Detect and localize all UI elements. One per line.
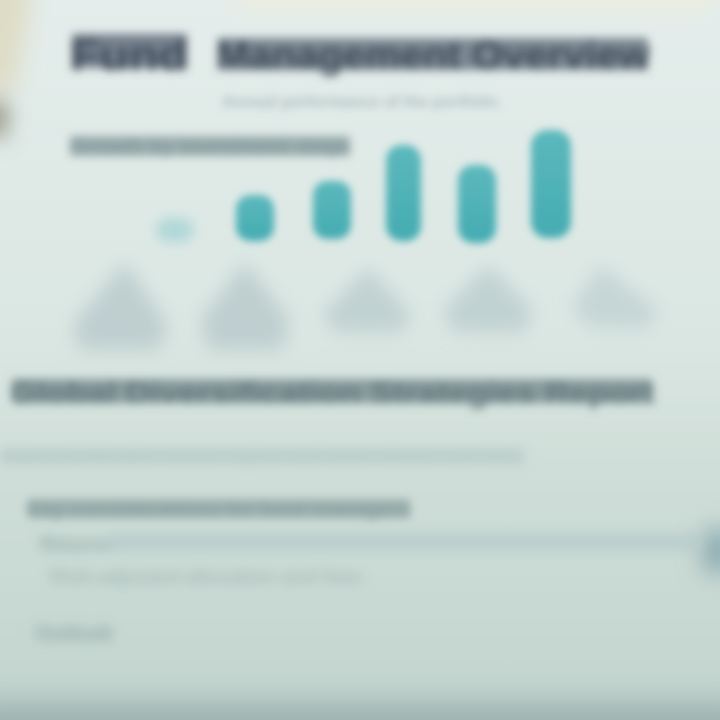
bar 4 <box>386 145 421 241</box>
icon: pie 1 <box>72 262 168 350</box>
bar 3 <box>313 181 351 239</box>
icon: pie 3 <box>322 268 412 332</box>
list line 1: Returns <box>40 534 112 554</box>
bar chart <box>156 130 571 243</box>
list line 2: Risk-adjusted allocation and fees <box>50 567 362 587</box>
detail heading: Key considerations for fund managers <box>26 500 411 521</box>
list line 3: Outlook <box>35 623 114 645</box>
title <box>70 31 650 80</box>
detail text block <box>35 534 700 645</box>
icon: pie 2 <box>200 262 290 350</box>
icon: pie 5 <box>572 265 660 328</box>
section heading: Global Diversification Strategies Report <box>10 377 655 410</box>
bar 6 <box>531 130 571 238</box>
subtitle: Annual performance of the portfolio <box>222 94 498 111</box>
bar 5 <box>458 165 496 243</box>
bar 2 <box>236 195 274 241</box>
section intro line: Balanced allocation across regions and asset classes over time <box>0 449 520 466</box>
chart heading: Growth by investment stage <box>70 136 350 158</box>
bar 1 <box>156 218 194 242</box>
list line 1 bar <box>110 534 700 550</box>
pie icons row <box>72 262 660 350</box>
icon: pie 4 <box>442 265 534 332</box>
title: Management Overview <box>216 35 650 77</box>
title: Fund <box>70 31 188 80</box>
